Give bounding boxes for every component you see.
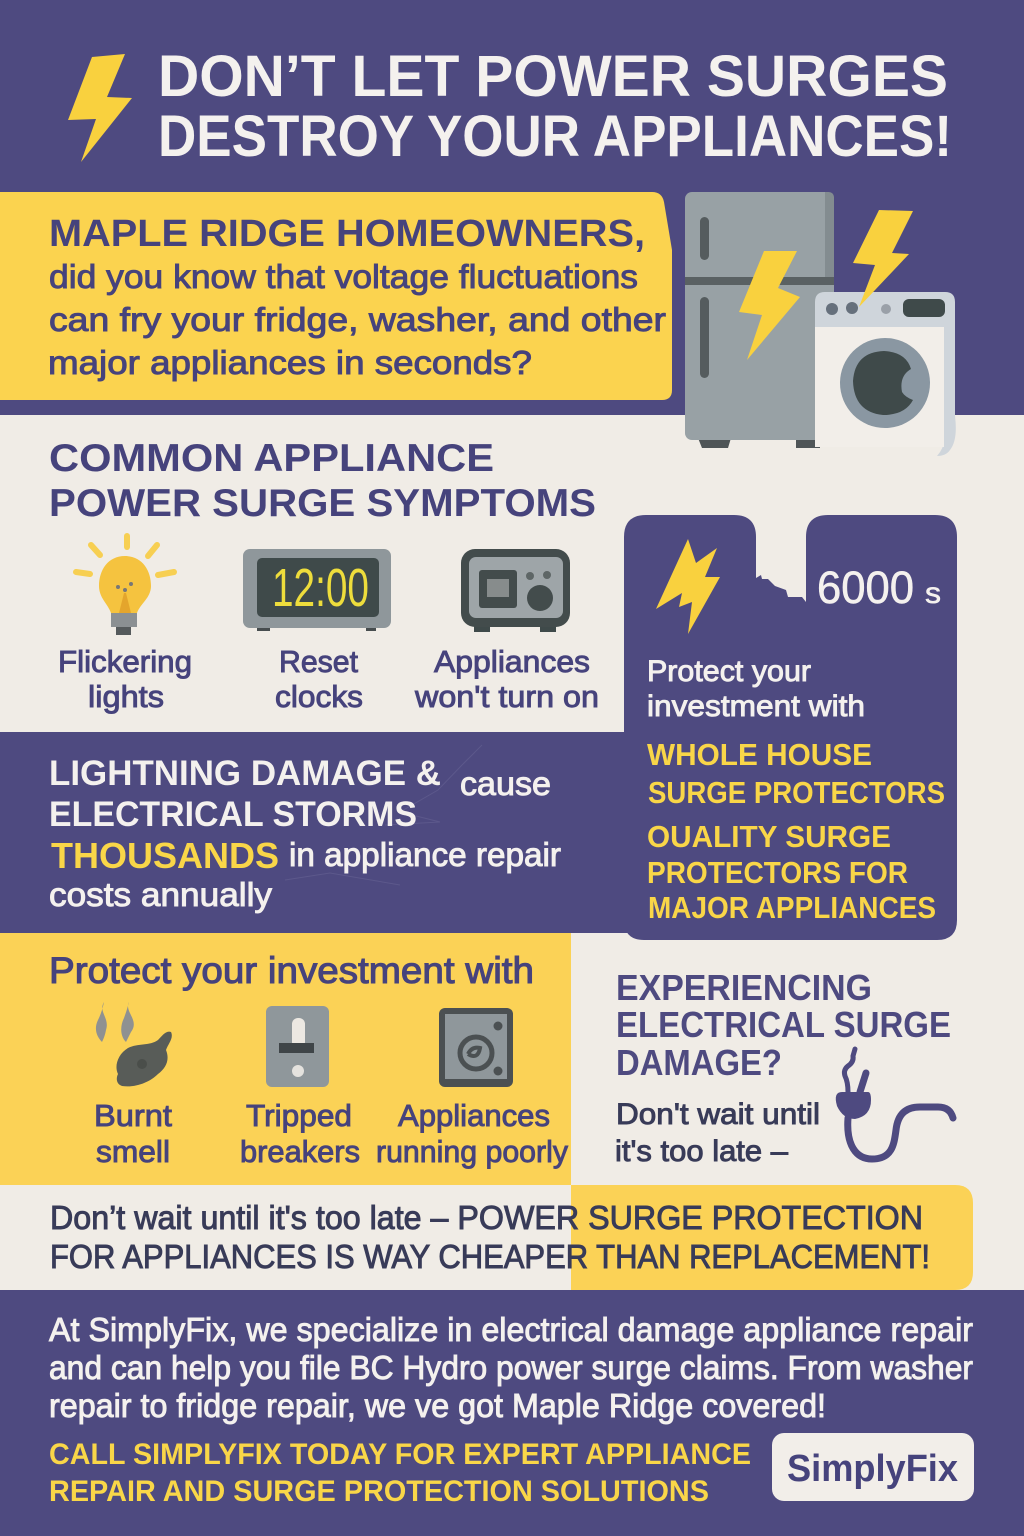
label: reset clocks: clocks — [275, 679, 363, 714]
heading: experiencing damage: DAMAGE? — [616, 1042, 782, 1083]
label: won't turn on — [414, 644, 599, 714]
banner text: FOR APPLIANCES IS WAY CHEAPER THAN REPLACEMENT! — [50, 1238, 930, 1275]
band text: costs annually — [49, 876, 273, 913]
footer text — [49, 1311, 973, 1424]
damage text: it's too late – — [615, 1135, 788, 1168]
intro text: can fry your fridge, washer, and other — [49, 301, 666, 338]
band text: ELECTRICAL STORMS — [49, 795, 417, 834]
intro text: did you know that voltage fluctuations — [49, 258, 638, 295]
heading: experiencing damage — [616, 967, 951, 1083]
icon: poorly running appliance — [439, 1008, 513, 1087]
footer text: repair to fridge repair, we ve got Maple Ridge covered! — [49, 1387, 826, 1424]
card list: SURGE PROTECTORS — [648, 775, 945, 810]
panel: intro callout — [0, 192, 672, 400]
band text: cause — [460, 765, 551, 802]
damage text: Don't wait until — [616, 1098, 820, 1131]
banner text — [50, 1199, 930, 1275]
call to action: CALL SIMPLYFIX TODAY FOR EXPERT APPLIANCE — [49, 1438, 751, 1471]
band text: in appliance repair — [289, 836, 561, 873]
label: tripped breakers: breakers — [240, 1134, 360, 1169]
band text: LIGHTNING DAMAGE & — [49, 754, 441, 793]
stat: 6000 s: s — [925, 577, 941, 610]
label: reset clocks: Reset — [279, 644, 358, 679]
icon: burnt smell — [96, 1002, 172, 1086]
icon: tripped breaker — [266, 1006, 329, 1087]
heading: common symptoms — [49, 437, 596, 525]
label: flickering lights: lights — [88, 679, 164, 714]
intro text — [48, 258, 666, 381]
card list: WHOLE HOUSE — [647, 737, 872, 772]
icon: digital clock: 12:00 — [272, 558, 369, 618]
label: appliances running poorly: running poorly — [376, 1134, 568, 1169]
label: won't turn on: won't turn on — [414, 679, 599, 714]
icon: burnt plug — [836, 1049, 953, 1159]
washer — [815, 292, 956, 456]
fridge — [685, 192, 834, 448]
bolt on fridge — [739, 251, 800, 360]
call to action — [49, 1438, 751, 1508]
card text: investment with — [647, 690, 865, 723]
panel: experiencing surge damage — [615, 967, 953, 1168]
panel: protect your investment — [0, 933, 571, 1185]
icon: card bolt — [656, 539, 720, 634]
banner text: Don’t wait until it's too late – POWER SURGE PROTECTION — [50, 1199, 923, 1236]
stat: 6000 s: 6000 — [817, 562, 914, 613]
label: burnt smell: smell — [96, 1134, 170, 1169]
label: reset clocks — [275, 644, 363, 714]
icon: header lightning bolt — [68, 54, 132, 162]
card text: Protect your — [647, 655, 811, 688]
footer text: At SimplyFix, we specialize in electrical damage appliance repair — [49, 1311, 973, 1348]
panel: footer — [0, 1290, 1024, 1536]
icon: flickering bulb — [76, 536, 174, 635]
label: appliances running poorly — [376, 1098, 568, 1169]
label: flickering lights — [58, 644, 192, 714]
band text — [49, 754, 561, 913]
band text: THOUSANDS — [51, 835, 279, 876]
intro heading: MAPLE RIDGE HOMEOWNERS, — [49, 213, 645, 255]
panel heading: Protect your investment with — [49, 950, 534, 991]
heading: experiencing damage: EXPERIENCING — [616, 967, 872, 1008]
heading: experiencing damage: ELECTRICAL SURGE — [616, 1004, 951, 1045]
label: tripped breakers: Tripped — [246, 1098, 352, 1133]
label: burnt smell: Burnt — [94, 1098, 172, 1133]
label: appliances running poorly: Appliances — [398, 1098, 550, 1133]
icon: digital clock — [243, 549, 391, 631]
card list: PROTECTORS FOR — [647, 855, 908, 890]
logo badge — [772, 1433, 974, 1501]
label: won't turn on: Appliances — [434, 644, 590, 679]
heading: common symptoms: POWER SURGE SYMPTOMS — [49, 482, 596, 525]
label: burnt smell — [94, 1098, 172, 1169]
card list: OUALITY SURGE — [647, 819, 891, 854]
footer text: and can help you file BC Hydro power surge claims. From washer — [49, 1349, 973, 1386]
title: DON’T LET POWER SURGES — [158, 44, 948, 109]
title: DESTROY YOUR APPLIANCES! — [158, 104, 952, 169]
panel: cheaper than replacement banner — [50, 1185, 973, 1290]
label: flickering lights: Flickering — [58, 644, 192, 679]
intro text: major appliances in seconds? — [48, 344, 532, 381]
label: tripped breakers — [240, 1098, 360, 1169]
heading: common symptoms: COMMON APPLIANCE — [49, 437, 494, 480]
card text — [647, 655, 865, 723]
damage text — [615, 1098, 820, 1168]
logo badge: SimplyFix — [787, 1448, 958, 1490]
bolt on washer — [853, 210, 913, 307]
panel: lightning damage band — [0, 732, 640, 933]
title — [158, 44, 952, 169]
icon: fridge and washer with bolts — [685, 192, 956, 456]
header band — [0, 0, 1024, 415]
card list: MAJOR APPLIANCES — [648, 890, 936, 925]
call to action: REPAIR AND SURGE PROTECTION SOLUTIONS — [49, 1475, 709, 1508]
icon: dead appliance — [461, 549, 570, 632]
card list — [647, 737, 945, 925]
panel: surge protector card — [624, 515, 957, 940]
